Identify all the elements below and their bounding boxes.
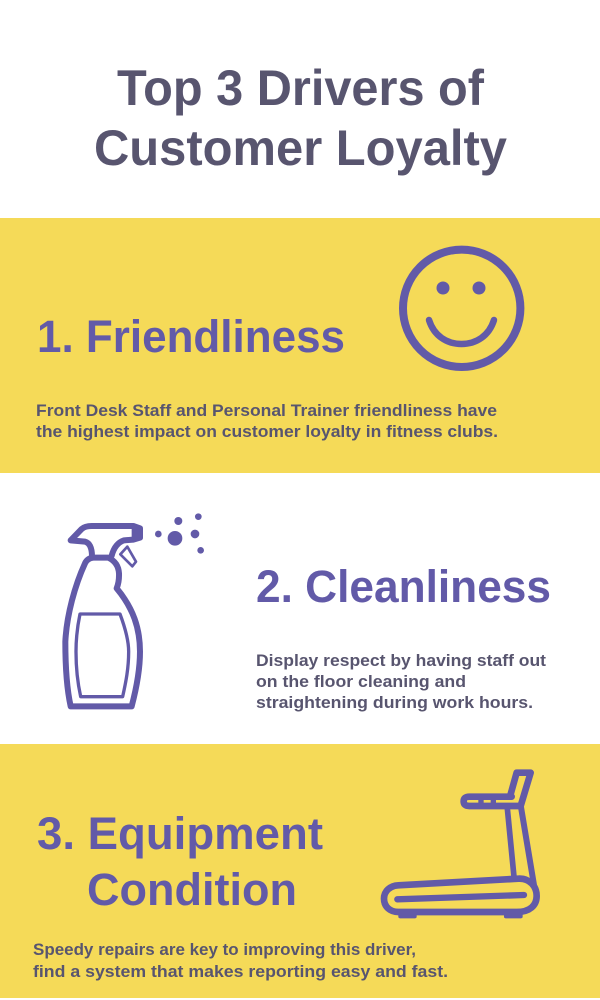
text block: cleanliness <box>256 651 546 712</box>
icon: treadmill <box>384 773 537 918</box>
title: Customer Loyalty <box>94 120 507 176</box>
text block: friendliness <box>36 401 498 441</box>
text block: cleanliness: straightening during work hours. <box>256 693 533 712</box>
title <box>94 60 507 176</box>
text block: equipment condition: find a system that makes reporting easy and fast. <box>33 962 448 981</box>
icon: spray bottle <box>65 513 204 706</box>
heading: equipment condition: Condition <box>87 864 297 915</box>
text block: cleanliness: Display respect by having staff out <box>256 651 546 670</box>
text block: equipment condition <box>33 940 448 981</box>
heading: equipment condition <box>37 808 323 915</box>
panel: cleanliness <box>0 473 600 744</box>
heading: cleanliness: 2. Cleanliness <box>256 561 551 612</box>
icon: smiley face <box>403 250 520 367</box>
text block: friendliness: Front Desk Staff and Personal Trainer friendliness have <box>36 401 497 420</box>
heading: equipment condition: 3. Equipment <box>37 808 323 859</box>
text block: friendliness: the highest impact on customer loyalty in fitness clubs. <box>36 422 498 441</box>
panel: friendliness <box>0 218 600 473</box>
text block: equipment condition: Speedy repairs are key to improving this driver, <box>33 940 416 959</box>
heading: friendliness: 1. Friendliness <box>37 311 345 362</box>
title: Top 3 Drivers of <box>117 60 484 116</box>
text block: cleanliness: on the floor cleaning and <box>256 672 466 691</box>
panel: equipment condition <box>0 744 600 998</box>
